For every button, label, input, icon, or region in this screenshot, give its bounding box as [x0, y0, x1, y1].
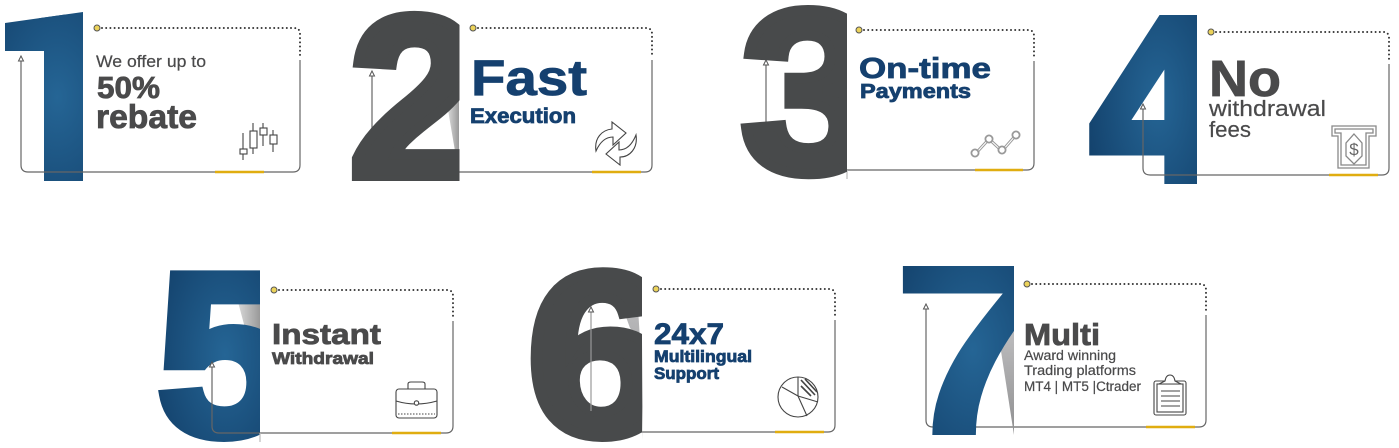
card 3 text: On-time: [859, 53, 991, 85]
card 1 text: rebate: [96, 98, 197, 135]
card 4 text: [1208, 50, 1326, 142]
card 3 text: [859, 53, 991, 103]
card 1 text: 50%: [97, 70, 160, 105]
card 7 text: Award winning: [1024, 348, 1116, 363]
card 6 outline: [620, 286, 835, 432]
card 2 text: [470, 50, 587, 128]
card 4 text: withdrawal: [1208, 96, 1326, 121]
card 2 text: Execution: [470, 105, 576, 128]
icon: cash machine: [1332, 126, 1376, 168]
icon: candlesticks: [240, 123, 277, 160]
card 5 text: Withdrawal: [272, 349, 374, 368]
shadow wedge 6: [621, 275, 643, 440]
icon: sync arrows: [596, 122, 636, 165]
card 7 outline: [924, 281, 1206, 427]
card 7 text: Trading platforms: [1024, 363, 1136, 378]
card 6 text: Support: [654, 364, 719, 383]
card 1: [5, 12, 301, 181]
shadow wedge 5: [238, 302, 260, 338]
card 1 text: [96, 52, 206, 135]
card 1 text: We offer up to: [96, 52, 206, 71]
shadow wedge 3: [835, 80, 847, 96]
icon: cash machine: $: [1349, 140, 1359, 159]
card 4: [1089, 15, 1390, 184]
shadow wedge 7: [999, 314, 1014, 435]
card 3 outline: [764, 27, 1034, 179]
card 7 text: Multi: [1024, 317, 1100, 352]
icon: clipboard: [1154, 375, 1186, 415]
arrow 6: [588, 307, 594, 411]
card 5 text: [272, 319, 381, 368]
card 6 text: 24x7: [654, 318, 724, 351]
card 3 text: Payments: [860, 81, 971, 103]
card 6 text: [654, 318, 752, 383]
card 7: [902, 266, 1207, 435]
card 2 text: Fast: [471, 50, 587, 106]
card 7 text: MT4 | MT5 |Ctrader: [1024, 379, 1142, 394]
card 2: [352, 10, 653, 181]
icon: pie chart: [778, 377, 818, 417]
card 4 text: fees: [1209, 117, 1251, 142]
card 6: [530, 267, 836, 442]
card 4 text: No: [1209, 50, 1281, 107]
card 4 outline: [1140, 29, 1389, 175]
card 1 outline: [18, 25, 300, 172]
card 2 outline: [370, 25, 652, 172]
card 3: [740, 5, 1035, 180]
shadow wedge 2: [448, 94, 459, 151]
icon: briefcase: [396, 382, 437, 418]
card 5 outline: [210, 287, 453, 442]
card 7 text: [1024, 317, 1142, 394]
icon: line chart: [971, 131, 1020, 157]
card 6 text: Multilingual: [654, 347, 752, 366]
card 5: [158, 270, 454, 442]
card 5 text: Instant: [272, 319, 381, 351]
